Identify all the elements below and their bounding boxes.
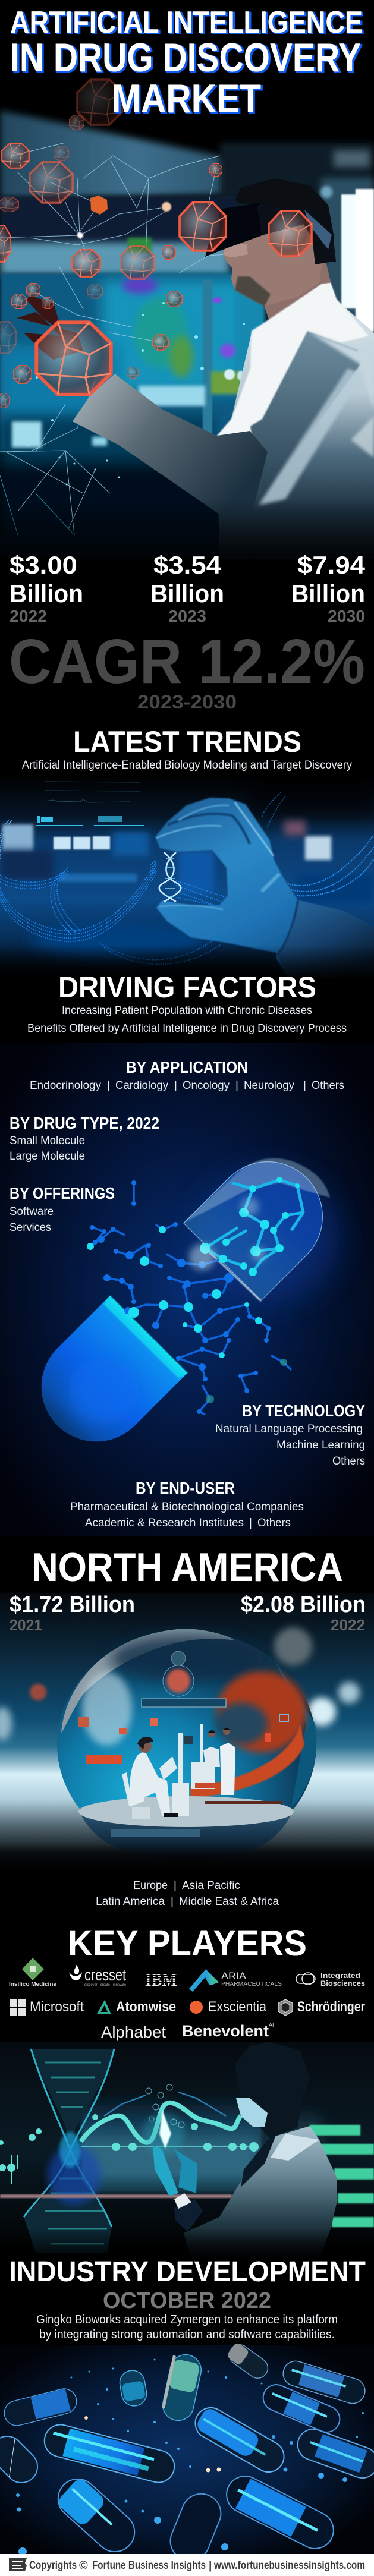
hand bbox=[17, 295, 83, 360]
capsule panel background bbox=[0, 1043, 374, 1536]
market size 2022 bbox=[10, 551, 83, 625]
market size 2030: 2030 bbox=[328, 607, 365, 625]
logo: cresset: cresset bbox=[84, 1966, 126, 1984]
copyright text: | bbox=[209, 2559, 212, 2572]
upper glass capsule bbox=[184, 1139, 345, 1302]
title bbox=[10, 5, 363, 121]
north america 2021: $1.72 Billion bbox=[10, 1592, 135, 1617]
capsule 5 bbox=[165, 2488, 227, 2566]
capsule 7 bbox=[220, 2470, 340, 2555]
key players heading: KEY PLAYERS bbox=[68, 1923, 307, 1963]
capsule with molecules bbox=[19, 1139, 345, 1464]
background band bbox=[81, 2092, 262, 2193]
development text: by integrating strong automation and software capabilities. bbox=[39, 2328, 335, 2341]
logo: Microsoft bbox=[10, 1999, 84, 2016]
by application: Oncology bbox=[183, 1079, 230, 1092]
by drug type bbox=[10, 1114, 159, 1163]
logo: Integrated Biosciences bbox=[296, 1973, 365, 1988]
by end-user: Others bbox=[257, 1517, 291, 1529]
image: lab inside glass dome bbox=[0, 1593, 374, 1872]
by drug type: Small Molecule bbox=[10, 1135, 85, 1147]
logo: Integrated Biosciences: Biosciences bbox=[320, 1980, 365, 1988]
dotted DNA ribbons bbox=[0, 792, 374, 964]
by application: BY APPLICATION bbox=[126, 1058, 248, 1076]
data bars bbox=[310, 2125, 374, 2227]
data lines bbox=[0, 2092, 259, 2198]
DNA helix bbox=[24, 2049, 114, 2253]
by end-user: Pharmaceutical & Biotechnological Companies bbox=[70, 1501, 304, 1513]
capsule 9 bbox=[259, 2380, 344, 2436]
sparkle dots bbox=[16, 2358, 364, 2556]
glowing hands bbox=[143, 2084, 197, 2196]
by application: Others bbox=[312, 1079, 344, 1092]
driving factors heading: DRIVING FACTORS bbox=[58, 971, 316, 1004]
title: MARKET bbox=[112, 76, 261, 121]
capsule 4 bbox=[50, 2471, 143, 2560]
by application: Cardiology bbox=[115, 1079, 168, 1092]
market size 2023: 2023 bbox=[168, 607, 206, 625]
other regions: Middle East & Africa bbox=[179, 1895, 279, 1908]
bokeh lights bbox=[0, 1627, 360, 1740]
molecules bbox=[87, 1177, 303, 1415]
capsule 6 bbox=[190, 2402, 290, 2478]
CAGR: 2023-2030 bbox=[137, 691, 237, 713]
market size 2022: Billion bbox=[10, 580, 83, 607]
north america heading: NORTH AMERICA bbox=[32, 1545, 343, 1590]
north america 2022: $2.08 Billion bbox=[241, 1592, 366, 1617]
market size 2023 bbox=[150, 551, 224, 625]
by application: | bbox=[174, 1079, 177, 1092]
logo: Aria Pharmaceuticals bbox=[189, 1969, 282, 1992]
other regions: | bbox=[171, 1895, 174, 1908]
other regions: Latin America bbox=[96, 1895, 165, 1908]
industry development image: DNA and scientist bbox=[0, 2042, 374, 2262]
finger creases bbox=[156, 802, 298, 954]
logo: BenevolentAI: AI bbox=[269, 2022, 274, 2028]
capsule 3 bbox=[0, 2430, 44, 2489]
logo: IBM: IBM bbox=[145, 1969, 177, 1990]
by technology: Natural Language Processing bbox=[215, 1423, 363, 1435]
copyright text: Fortune Business Insights bbox=[92, 2559, 206, 2572]
market size 2023: Billion bbox=[150, 580, 224, 607]
by technology bbox=[215, 1402, 365, 1467]
other regions: Asia Pacific bbox=[182, 1879, 240, 1892]
logo: Atomwise: Atomwise bbox=[116, 1999, 176, 2015]
logo: Insilico Medicine bbox=[9, 1958, 56, 1987]
folder icons bbox=[54, 836, 110, 849]
by application: Endocrinology bbox=[30, 1079, 101, 1092]
development text: Gingko Bioworks acquired Zymergen to enhance its platform bbox=[36, 2313, 338, 2326]
other regions bbox=[96, 1879, 279, 1908]
copyright text: Copyrights bbox=[29, 2559, 77, 2572]
red reflection bbox=[190, 1671, 306, 1798]
glass dome bbox=[57, 1630, 316, 1859]
driving factors list: Benefits Offered by Artificial Intelligence in Drug Discovery Process bbox=[27, 1022, 347, 1035]
footer logo bbox=[9, 2558, 27, 2571]
DNA helix bbox=[159, 852, 181, 902]
by end-user: Academic & Research Institutes bbox=[85, 1517, 244, 1529]
logo: BenevolentAI: Benevolent bbox=[182, 2022, 269, 2040]
lower solid capsule bbox=[19, 1295, 188, 1464]
image: blue capsules bbox=[0, 2341, 374, 2566]
footer bar bbox=[0, 2554, 374, 2576]
copyright text: © bbox=[79, 2559, 88, 2572]
screen bars bbox=[36, 816, 144, 826]
hero image: VR scientist with molecules bbox=[0, 0, 374, 577]
north america 2022: 2022 bbox=[331, 1616, 365, 1634]
development text bbox=[36, 2313, 338, 2341]
driving factors list: Increasing Patient Population with Chronic Diseases bbox=[62, 1004, 312, 1017]
by end-user: BY END-USER bbox=[136, 1479, 235, 1497]
by application: | bbox=[235, 1079, 238, 1092]
molecular network lines bbox=[0, 143, 256, 535]
by offerings: BY OFFERINGS bbox=[10, 1184, 115, 1202]
by end-user bbox=[70, 1479, 304, 1529]
by end-user: | bbox=[249, 1517, 252, 1529]
by drug type: BY DRUG TYPE, 2022 bbox=[10, 1114, 159, 1132]
standing scientists bbox=[203, 1728, 235, 1795]
logo: Schrödinger bbox=[278, 1999, 365, 2016]
man: sleeve bbox=[73, 374, 268, 516]
logo: Exscientia: Exscientia bbox=[208, 1999, 267, 2015]
market size 2022: 2022 bbox=[10, 607, 47, 625]
latest trends text: Artificial Intelligence-Enabled Biology Modeling and Target Discovery bbox=[22, 759, 352, 771]
glowing network nodes bbox=[27, 232, 245, 485]
capsule 2 bbox=[41, 2421, 178, 2486]
by application: | bbox=[303, 1079, 306, 1092]
by offerings bbox=[10, 1184, 115, 1234]
man: neck and face bbox=[223, 208, 333, 339]
driving factors list bbox=[27, 1004, 347, 1035]
forearm bbox=[276, 900, 374, 978]
date: OCTOBER 2022 bbox=[103, 2288, 271, 2313]
by technology: Others bbox=[332, 1455, 365, 1467]
market size 2030: Billion bbox=[291, 580, 365, 607]
by application: Neurology bbox=[244, 1079, 294, 1092]
HUD labels bbox=[78, 1651, 288, 1764]
glove bbox=[155, 798, 374, 978]
logo: Microsoft: Microsoft bbox=[30, 1999, 84, 2015]
by application bbox=[30, 1058, 344, 1092]
by technology: Machine Learning bbox=[276, 1439, 365, 1451]
logo: Insilico Medicine: Insilico Medicine bbox=[9, 1981, 56, 1987]
industry development heading: INDUSTRY DEVELOPMENT bbox=[9, 2256, 366, 2288]
scientist bbox=[174, 2042, 337, 2259]
logos bbox=[9, 1958, 365, 2041]
glare bbox=[82, 1672, 132, 1746]
logo: Aria Pharmaceuticals: PHARMACEUTICALS bbox=[221, 1981, 282, 1988]
logo: Integrated Biosciences: Integrated bbox=[320, 1973, 360, 1980]
dome base bbox=[78, 1810, 293, 1860]
logo: Alphabet: Alphabet bbox=[101, 2023, 166, 2041]
other regions: | bbox=[174, 1879, 177, 1892]
seated scientist bbox=[122, 1737, 178, 1819]
by offerings: Software bbox=[10, 1205, 54, 1218]
market size 2030 bbox=[291, 551, 366, 625]
by application: | bbox=[107, 1079, 110, 1092]
molecule polyhedra bbox=[0, 80, 312, 408]
image: gloved hand holding DNA bbox=[0, 773, 374, 981]
capsule 12 bbox=[160, 2352, 204, 2423]
copyright text bbox=[29, 2559, 365, 2572]
north america 2021: 2021 bbox=[10, 1616, 42, 1634]
north america 2021 bbox=[10, 1592, 135, 1634]
capsule 13 bbox=[118, 2369, 149, 2408]
north america 2022 bbox=[241, 1592, 366, 1634]
by drug type: Large Molecule bbox=[10, 1150, 85, 1163]
other regions: Europe bbox=[133, 1879, 168, 1892]
capsule 10 bbox=[280, 2358, 368, 2407]
capsule 1 bbox=[2, 2386, 79, 2428]
market size 2023: $3.54 bbox=[153, 551, 222, 579]
logo: cresset bbox=[69, 1964, 127, 1987]
lab equipment bbox=[159, 1724, 282, 1816]
man: hair bbox=[235, 178, 334, 264]
VR headset bbox=[205, 203, 336, 262]
by offerings: Services bbox=[10, 1221, 51, 1234]
capsule 11 bbox=[225, 2341, 272, 2382]
capsule 8 bbox=[293, 2425, 374, 2482]
man: shirt bbox=[217, 283, 374, 559]
logo: Aria Pharmaceuticals: ARIA bbox=[221, 1970, 247, 1982]
background haze bands bbox=[0, 111, 374, 559]
market size 2030: $7.94 bbox=[297, 551, 366, 579]
latest trends heading: LATEST TRENDS bbox=[73, 725, 301, 758]
logo: cresset: discover · create · innovate bbox=[84, 1983, 127, 1987]
blurred lab bbox=[0, 773, 374, 956]
market size 2022: $3.00 bbox=[10, 551, 77, 579]
